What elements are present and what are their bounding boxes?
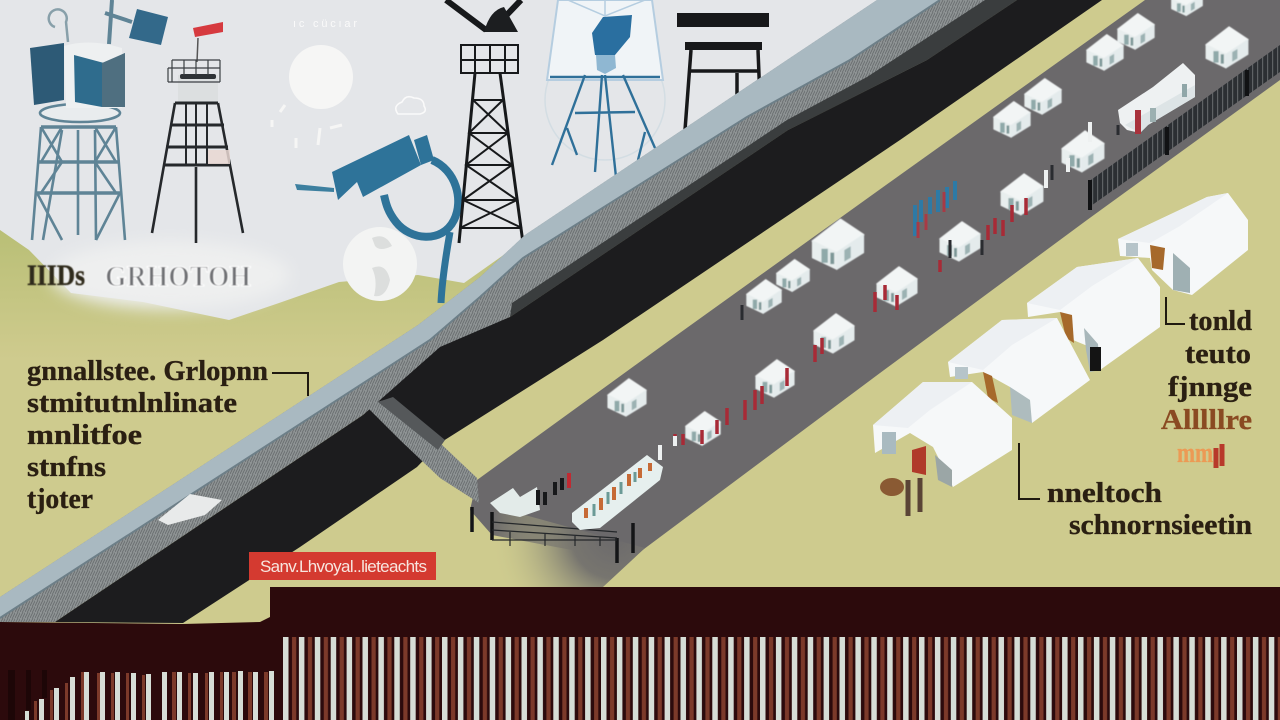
tent 2 roof: [1027, 258, 1138, 310]
panel: blue dome tower: [545, 0, 665, 177]
right text line 3: fjnnge: [1168, 371, 1252, 403]
right text line 1: tonld: [1189, 305, 1252, 337]
icon: globe: [343, 227, 417, 301]
tent 1 roof: [1118, 193, 1228, 243]
tent 4 crowd: [880, 478, 904, 496]
tent 10: [877, 267, 917, 306]
ring antenna: [49, 9, 68, 42]
panel: black lattice tower: [446, 0, 523, 243]
camera lower: [596, 55, 616, 74]
queue blue dark accents: [918, 192, 944, 238]
large tent 3: [948, 318, 1090, 423]
panel: black stand: [677, 13, 769, 130]
red label: [249, 552, 436, 580]
upper fence bars: [283, 637, 1280, 720]
fence rail: [0, 0, 940, 618]
lattice legs: [152, 103, 243, 243]
lattice crossbars: [460, 100, 522, 228]
long checkpoint hall: [572, 455, 663, 530]
long tent window 2: [1182, 84, 1187, 97]
fence top band: [0, 0, 940, 618]
small tents: [608, 0, 1248, 445]
flag pole: [197, 38, 198, 62]
camera visor: [295, 184, 334, 192]
left panel: [30, 43, 64, 105]
tent 1 window: [1126, 243, 1138, 256]
tent 5: [1206, 27, 1248, 68]
red label text: Sanv.Lhvoyal..lieteachts: [260, 557, 427, 576]
cab: [178, 75, 218, 103]
dark bars: [8, 670, 47, 720]
right panel shade: [102, 53, 125, 107]
dark fence footing: [510, 0, 1017, 317]
tent 16: [686, 412, 720, 445]
tent 4 people: [908, 478, 920, 516]
checkpoint fence: [472, 507, 633, 563]
cab roof: [180, 74, 216, 79]
caption: tower label: [27, 259, 251, 293]
tent 3 grey door: [1010, 387, 1032, 423]
bridge mesh: [365, 398, 479, 503]
tent 2 black door: [1090, 347, 1101, 371]
road fade below fence: [470, 500, 645, 587]
rails: [492, 522, 617, 546]
cable: [384, 160, 458, 237]
panel: large tents: [873, 193, 1248, 516]
left text line 2: stmitutnlnlinate: [27, 387, 237, 419]
stand legs: [685, 50, 760, 130]
glow behind caption: [50, 241, 290, 309]
stand shelf: [685, 42, 762, 50]
camera back cap: [414, 135, 434, 165]
right text line 2: teuto: [1185, 338, 1251, 370]
red figure: [1216, 444, 1222, 468]
bottom text line 1: nneltoch: [1047, 477, 1162, 509]
panel: lookout tower with flag: [152, 22, 243, 243]
top unit: [484, 7, 518, 32]
long white tent: [1118, 63, 1195, 134]
top connector: [64, 42, 122, 108]
caption white part: GRHOTOH: [105, 260, 251, 293]
tent 8: [1001, 174, 1043, 215]
reflective panel: [547, 0, 663, 80]
large tent 2: [1027, 258, 1160, 372]
queue white figures: [660, 122, 1090, 460]
tent 4 window: [882, 432, 896, 454]
tent 3: [1087, 35, 1123, 70]
lower fence bars: [8, 670, 274, 720]
left text line 3: mnlitfoe: [27, 419, 142, 451]
red paint mark: [208, 150, 230, 164]
tent 4 roof: [873, 382, 972, 428]
lattice legs: [459, 73, 523, 243]
tent 13: [747, 280, 781, 313]
panel cross lines: [568, 0, 645, 16]
faint circle: [545, 40, 665, 160]
tent 3 roof: [948, 318, 1057, 370]
sky panel: [0, 0, 880, 320]
tent 1: [994, 102, 1030, 137]
cable drop: [441, 232, 450, 303]
queue: red people: [660, 122, 1118, 460]
label: bottom text block: [1019, 443, 1252, 541]
railing: [168, 60, 220, 82]
panel: watchtower with panels: [30, 0, 168, 240]
pale bars: [25, 671, 274, 720]
black river band: [55, 0, 1102, 623]
long tent shade: [1125, 85, 1195, 133]
tower frame: [32, 104, 125, 240]
hall people: [586, 463, 650, 518]
tent 12: [777, 260, 809, 292]
tent 6: [1172, 0, 1202, 16]
tent 9: [940, 222, 980, 261]
caption: tower label: IIIDs: [27, 259, 85, 292]
border fence wall: [0, 0, 1017, 622]
queue: blue people: [915, 181, 955, 238]
dark base panel: [0, 587, 1280, 720]
tent 2: [1025, 79, 1061, 114]
fence mesh: [0, 0, 1017, 622]
hall people blue: [594, 472, 635, 516]
tent 2 grey door: [1084, 328, 1100, 372]
flag: [193, 22, 223, 37]
queue red end: [567, 473, 571, 488]
tent 1 brown door: [1150, 245, 1165, 270]
bottom text line 2: schnornsieetin: [1069, 509, 1252, 541]
leader line: [272, 373, 308, 396]
checkpoint shelter: [490, 487, 540, 517]
greenish hill ground: [0, 230, 520, 360]
tent 3 brown door: [983, 372, 998, 403]
tent 3 window: [955, 367, 968, 379]
top arms: [446, 0, 521, 30]
bottom leader line: [1019, 443, 1040, 499]
long tent window: [1150, 108, 1156, 122]
white circle icon: [272, 45, 353, 148]
label: left text block: [27, 355, 308, 515]
iron fence: [1088, 45, 1280, 210]
right panel: [74, 53, 125, 107]
orange smudge text: mm: [1177, 437, 1213, 469]
tent 4 grey door: [935, 455, 952, 487]
tent 4 red door: [912, 446, 926, 475]
camera mount: [592, 15, 632, 55]
iron fence posts: [1090, 70, 1247, 210]
tent 11: [813, 220, 863, 269]
large tent 1: [1118, 193, 1248, 295]
antenna pole: [105, 0, 132, 44]
grey road: [470, 0, 1280, 560]
tent 14: [814, 314, 854, 353]
camera body: [332, 135, 421, 200]
long tent figure: [1135, 110, 1141, 134]
white dots: [272, 105, 342, 148]
tent 4: [1118, 14, 1154, 49]
label: right text block: [1161, 297, 1252, 469]
camera box: [129, 9, 168, 45]
tent 7: [1062, 131, 1104, 172]
platform: [461, 45, 518, 73]
right text line 4: Alllllre: [1161, 404, 1252, 436]
right leader line: [1166, 297, 1185, 324]
large tent 4: [873, 382, 1012, 516]
icon: cloud outline: [396, 97, 425, 114]
posts: [472, 507, 633, 563]
tent 15: [756, 360, 794, 397]
tent 2 brown door: [1060, 312, 1074, 343]
icon: surveillance camera: [295, 135, 458, 303]
left text line 4: stnfns: [27, 451, 106, 483]
white damage patch: [158, 494, 222, 525]
bridge dark band: [378, 397, 445, 450]
fence bridge: [365, 397, 479, 503]
left text line 5: tjoter: [27, 483, 93, 515]
queue: dark people: [538, 473, 569, 505]
white annotation text: ıc cücıar: [293, 18, 357, 30]
red bars: [34, 672, 268, 720]
tent 1 grey door: [1173, 253, 1190, 293]
tent 17: [608, 379, 646, 416]
blue lattice: [550, 75, 660, 177]
left text line 1: gnnallstee. Grlopnn: [27, 355, 268, 387]
stand top bar: [677, 13, 769, 27]
queue dark figures: [742, 125, 1118, 320]
